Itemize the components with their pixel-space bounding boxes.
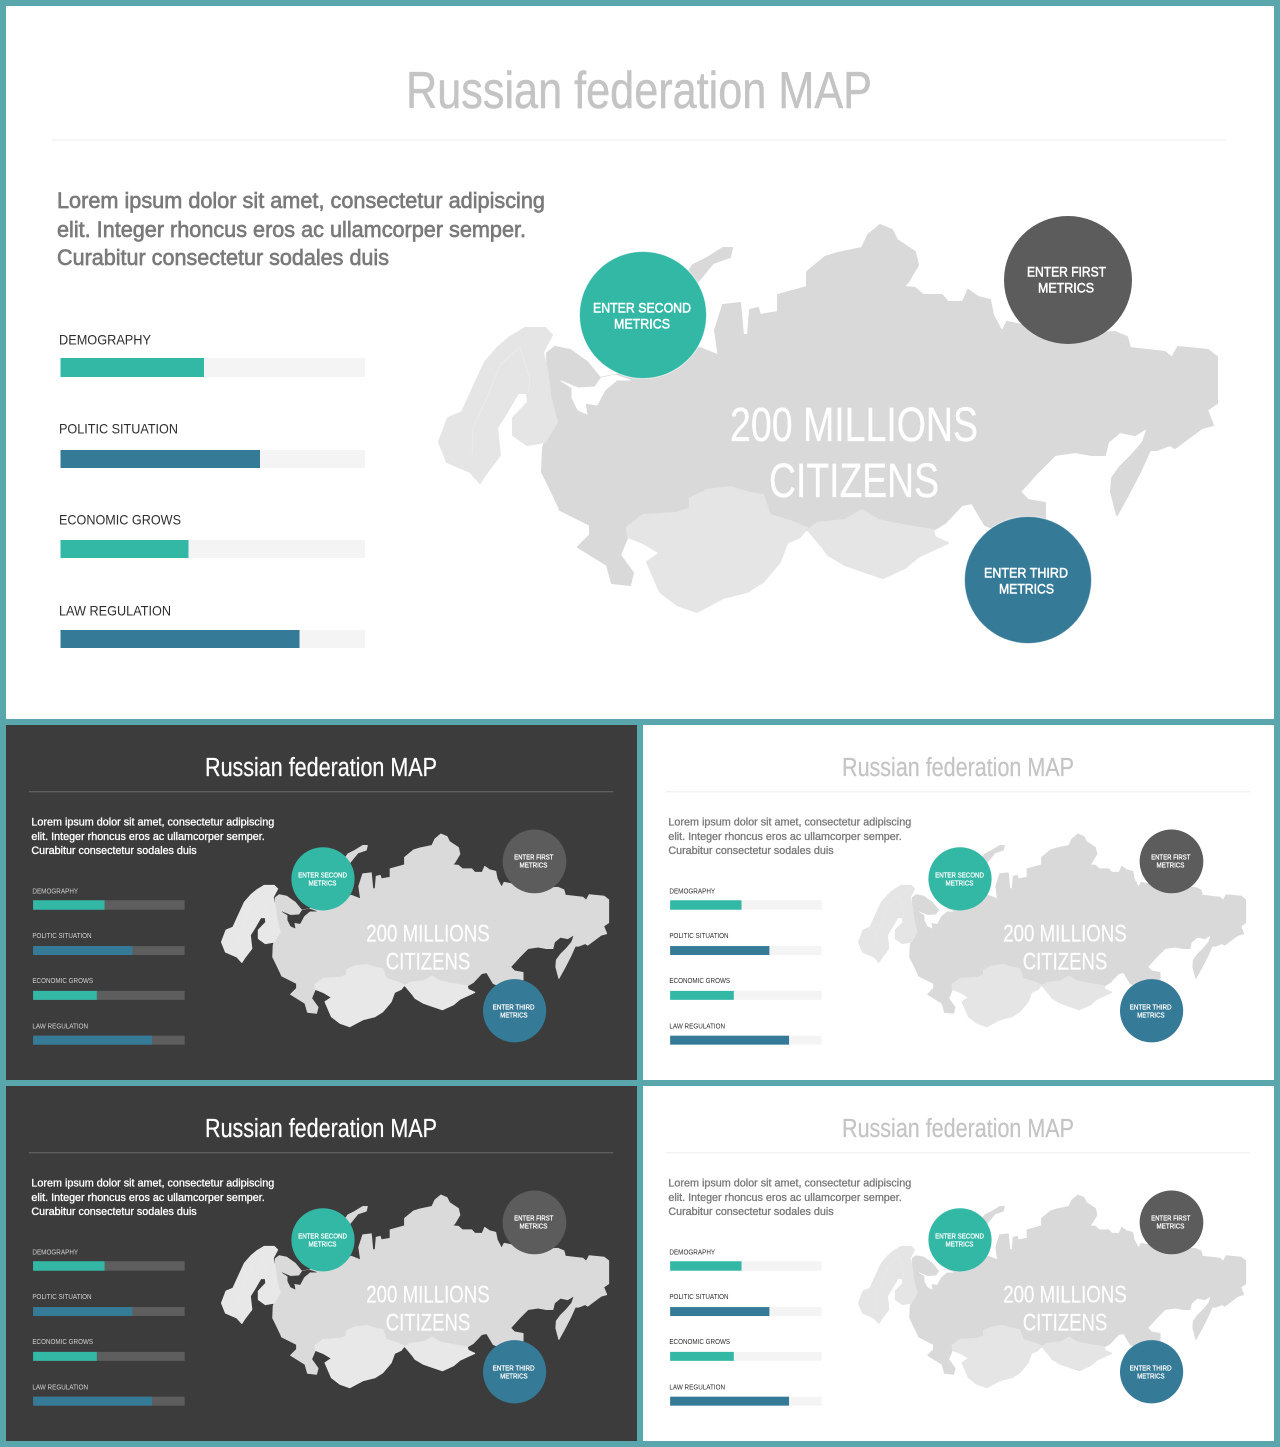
map of Russia and neighbours — [858, 834, 1246, 1027]
intro text — [31, 817, 274, 857]
circle: third metrics: METRICS — [500, 1373, 528, 1380]
intro text: elit. Integer rhoncus eros ac ullamcorper semper. — [668, 1192, 902, 1204]
circle: third metrics: METRICS — [1137, 1373, 1165, 1380]
map caption: 200 MILLIONS — [1003, 921, 1127, 948]
circle: first metrics: ENTER FIRST — [514, 1216, 554, 1223]
circle: first metrics: ENTER FIRST — [1151, 855, 1191, 862]
bar: politic situation: POLITIC SITUATION — [669, 933, 729, 940]
bar: demography — [32, 1250, 185, 1271]
bar: economic grows: ECONOMIC GROWS — [669, 1339, 730, 1346]
bar: economic grows — [669, 1339, 822, 1361]
map caption: CITIZENS — [386, 948, 470, 975]
circle: third metrics: METRICS — [1137, 1012, 1165, 1019]
bar: politic situation: POLITIC SITUATION — [59, 420, 178, 436]
intro text: Curabitur consectetur sodales duis — [31, 1206, 197, 1218]
map caption: 200 MILLIONS — [366, 921, 490, 948]
circle: first metrics — [1004, 216, 1132, 344]
bar: economic grows: ECONOMIC GROWS — [32, 1339, 93, 1346]
circle: second metrics — [580, 252, 706, 378]
intro text — [31, 1178, 274, 1218]
bar: demography: DEMOGRAPHY — [669, 1250, 715, 1257]
title: Russian federation MAP — [842, 1115, 1074, 1143]
intro text: Lorem ipsum dolor sit amet, consectetur adipiscing — [668, 1178, 911, 1190]
bar: law regulation: LAW REGULATION — [59, 602, 171, 618]
title: Russian federation MAP — [842, 754, 1074, 782]
circle: first metrics — [503, 1191, 566, 1254]
bar: demography — [669, 1250, 822, 1271]
map caption: CITIZENS — [386, 1309, 470, 1336]
bar: demography — [32, 889, 185, 910]
intro text: Curabitur consectetur sodales duis — [31, 845, 197, 857]
circle: first metrics — [1140, 1191, 1203, 1254]
panel: dark variant top left — [6, 725, 637, 1080]
map caption — [366, 1282, 490, 1336]
intro text: Curabitur consectetur sodales duis — [57, 245, 389, 270]
intro text: elit. Integer rhoncus eros ac ullamcorper semper. — [31, 831, 265, 843]
bar: demography: DEMOGRAPHY — [59, 332, 152, 348]
circle: second metrics: ENTER SECOND — [298, 873, 347, 880]
map caption — [366, 921, 490, 975]
circle: first metrics: METRICS — [1038, 279, 1094, 295]
panel: light variant bottom right — [643, 1086, 1274, 1441]
bar: economic grows — [669, 978, 822, 1000]
map caption: CITIZENS — [769, 455, 939, 508]
circle: first metrics: METRICS — [520, 863, 548, 870]
map caption: 200 MILLIONS — [366, 1282, 490, 1309]
map of Russia and neighbours — [221, 1195, 609, 1388]
bar: politic situation — [669, 933, 822, 955]
circle: second metrics: METRICS — [614, 315, 670, 331]
circle: second metrics — [291, 847, 355, 910]
intro text — [57, 188, 545, 270]
bar: politic situation — [669, 1294, 822, 1316]
map caption: CITIZENS — [1023, 1309, 1107, 1336]
circle: second metrics: ENTER SECOND — [593, 299, 691, 315]
circle: second metrics: METRICS — [309, 880, 337, 887]
bar: law regulation: LAW REGULATION — [669, 1384, 725, 1391]
bar: law regulation — [32, 1384, 185, 1406]
map of Russia and neighbours — [858, 1195, 1246, 1388]
intro text: Lorem ipsum dolor sit amet, consectetur adipiscing — [31, 817, 274, 829]
intro text: Curabitur consectetur sodales duis — [668, 845, 834, 857]
circle: third metrics — [1120, 979, 1183, 1042]
map of Russia and neighbours — [221, 834, 609, 1027]
bar: law regulation — [59, 602, 365, 648]
circle: second metrics — [291, 1208, 355, 1271]
circle: second metrics: METRICS — [309, 1241, 337, 1248]
circle: third metrics: ENTER THIRD — [493, 1365, 534, 1372]
bar: demography: DEMOGRAPHY — [32, 889, 78, 896]
circle: third metrics: ENTER THIRD — [1130, 1004, 1171, 1011]
circle: third metrics — [483, 1340, 546, 1403]
bar: politic situation: POLITIC SITUATION — [669, 1294, 729, 1301]
intro text: elit. Integer rhoncus eros ac ullamcorper semper. — [57, 217, 526, 242]
circle: first metrics: METRICS — [1157, 1224, 1185, 1231]
title: Russian federation MAP — [205, 754, 437, 782]
circle: first metrics — [1140, 830, 1203, 893]
intro text — [668, 817, 911, 857]
circle: second metrics: ENTER SECOND — [935, 1234, 984, 1241]
bar: demography — [59, 332, 365, 377]
bar: demography: DEMOGRAPHY — [669, 889, 715, 896]
bar: law regulation — [669, 1384, 822, 1406]
intro text: Lorem ipsum dolor sit amet, consectetur adipiscing — [668, 817, 911, 829]
circle: second metrics: METRICS — [946, 1241, 974, 1248]
circle: third metrics: METRICS — [500, 1012, 528, 1019]
bar: law regulation: LAW REGULATION — [32, 1023, 88, 1030]
circle: second metrics — [928, 847, 992, 910]
bar: demography: DEMOGRAPHY — [32, 1250, 78, 1257]
intro text: Lorem ipsum dolor sit amet, consectetur adipiscing — [57, 188, 545, 213]
map caption: CITIZENS — [1023, 948, 1107, 975]
circle: first metrics: METRICS — [520, 1224, 548, 1231]
circle: second metrics: ENTER SECOND — [298, 1234, 347, 1241]
circle: second metrics: ENTER SECOND — [935, 873, 984, 880]
map caption — [730, 399, 978, 508]
bar: economic grows: ECONOMIC GROWS — [669, 978, 730, 985]
circle: third metrics — [483, 979, 546, 1042]
circle: first metrics: METRICS — [1157, 863, 1185, 870]
circle: second metrics: METRICS — [946, 880, 974, 887]
bar: economic grows — [32, 978, 185, 1000]
map of Russia and neighbours — [439, 225, 1217, 612]
bar: politic situation: POLITIC SITUATION — [32, 933, 92, 940]
bar: economic grows — [59, 512, 365, 558]
bar: law regulation: LAW REGULATION — [32, 1384, 88, 1391]
map caption: 200 MILLIONS — [1003, 1282, 1127, 1309]
intro text: elit. Integer rhoncus eros ac ullamcorper semper. — [31, 1192, 265, 1204]
circle: first metrics: ENTER FIRST — [1027, 263, 1106, 279]
bar: economic grows: ECONOMIC GROWS — [59, 512, 181, 528]
intro text: Lorem ipsum dolor sit amet, consectetur adipiscing — [31, 1178, 274, 1190]
bar: economic grows — [32, 1339, 185, 1361]
panel: dark variant bottom left — [6, 1086, 637, 1441]
panel: main light slide — [6, 6, 1274, 719]
bar: politic situation: POLITIC SITUATION — [32, 1294, 92, 1301]
panel: light variant top right — [643, 725, 1274, 1080]
bar: politic situation — [59, 420, 365, 468]
bar: demography — [669, 889, 822, 910]
circle: third metrics: METRICS — [999, 580, 1054, 596]
circle: first metrics — [503, 830, 566, 893]
circle: third metrics: ENTER THIRD — [984, 564, 1068, 580]
circle: first metrics: ENTER FIRST — [1151, 1216, 1191, 1223]
map caption — [1003, 921, 1127, 975]
bar: economic grows: ECONOMIC GROWS — [32, 978, 93, 985]
title: Russian federation MAP — [406, 62, 872, 120]
map caption — [1003, 1282, 1127, 1336]
intro text: elit. Integer rhoncus eros ac ullamcorper semper. — [668, 831, 902, 843]
intro text — [668, 1178, 911, 1218]
map caption: 200 MILLIONS — [730, 399, 978, 452]
circle: third metrics — [964, 516, 1092, 644]
circle: third metrics: ENTER THIRD — [1130, 1365, 1171, 1372]
bar: law regulation: LAW REGULATION — [669, 1023, 725, 1030]
circle: second metrics — [928, 1208, 992, 1271]
bar: law regulation — [669, 1023, 822, 1045]
intro text: Curabitur consectetur sodales duis — [668, 1206, 834, 1218]
circle: third metrics — [1120, 1340, 1183, 1403]
circle: third metrics: ENTER THIRD — [493, 1004, 534, 1011]
title: Russian federation MAP — [205, 1115, 437, 1143]
bar: politic situation — [32, 933, 185, 955]
circle: first metrics: ENTER FIRST — [514, 855, 554, 862]
bar: law regulation — [32, 1023, 185, 1045]
bar: politic situation — [32, 1294, 185, 1316]
